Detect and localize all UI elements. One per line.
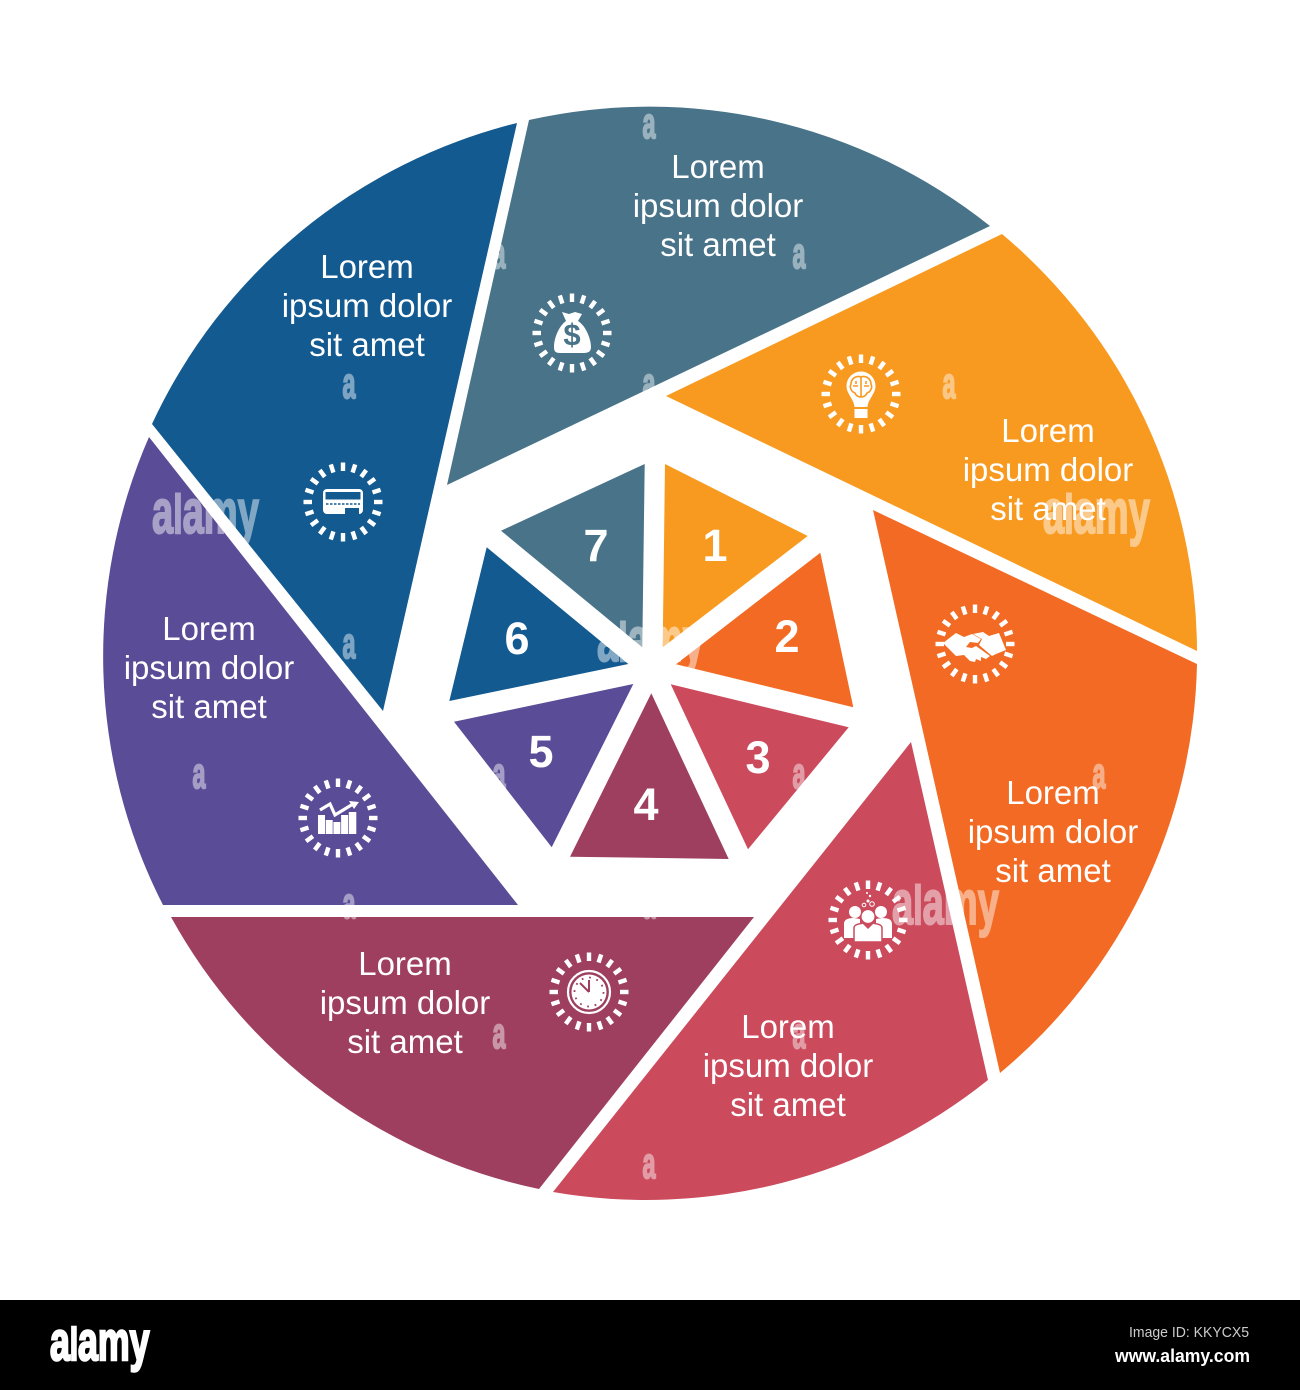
watermark: right: alamy [1043,476,1150,546]
footer logo: alamy [50,1310,150,1372]
inner triangle 3 [671,684,849,849]
icon: credit card [304,462,382,542]
watermark: small repeated marks: a [793,1009,806,1058]
text block: segment 4: ipsum dolor [320,984,490,1021]
text block: segment 1: ipsum dolor [963,451,1133,488]
watermark: small repeated marks: a [493,229,506,278]
watermark: small repeated marks: a [343,619,356,668]
outer segment 3: red [553,742,988,1200]
footer image id: Image ID: KKYCX5 [1129,1324,1249,1341]
text block: segment 6: Lorem [320,248,414,285]
text block: segment 7: ipsum dolor [633,187,803,224]
outer segment 6: blue [152,123,517,711]
outer segment 5: purple [103,437,518,905]
text block: segment 5: ipsum dolor [124,649,294,686]
watermark: small repeated marks: a [793,229,806,278]
text block: segment 7: sit amet [660,226,776,263]
inner triangle 6 [449,547,628,701]
watermark: lower right: alamy [892,867,999,937]
number 3: 3 [745,732,771,783]
outer segment 1: orange [666,234,1197,651]
inner triangle 2 [676,553,853,707]
text block: segment 4: sit amet [347,1023,463,1060]
text block: segment 1: Lorem [1001,412,1095,449]
watermark: small repeated marks: a [643,1139,656,1188]
number 1: 1 [702,520,728,571]
watermark: small repeated marks: a [493,749,506,798]
text block: segment 5: Lorem [162,610,256,647]
icon: bar chart with rising arrow [298,778,378,858]
icon: lightbulb with brain [822,354,900,434]
inner triangle 4 [570,693,729,859]
inner triangle 1 [663,464,808,647]
icon: wall clock [550,952,628,1032]
text block: segment 1: sit amet [990,490,1106,527]
outer segment 7: slate teal [447,107,990,485]
watermark: small repeated marks: a [343,879,356,928]
outer segment 4: plum [171,917,754,1189]
icon: money bag [532,294,612,372]
text block: segment 2: ipsum dolor [968,813,1138,850]
number 6: 6 [504,613,530,664]
watermark: small repeated marks [193,99,1106,1188]
text block: segment 2: Lorem [1006,774,1100,811]
text block: segment 2: sit amet [995,852,1111,889]
icon: money bag: $ [563,317,581,352]
footer bar [0,1300,1300,1390]
watermark: small repeated marks: a [493,1009,506,1058]
watermark: small repeated marks: a [643,879,656,928]
inner triangle 7 [501,464,645,647]
watermark: left: alamy [152,476,259,546]
watermark: small repeated marks: a [1093,749,1106,798]
footer url: www.alamy.com [1114,1346,1250,1366]
watermark: small repeated marks: a [793,749,806,798]
icon: handshake [936,604,1014,684]
text block: segment 7: Lorem [671,148,765,185]
text block: segment 6: ipsum dolor [282,287,452,324]
text block: segment 5: sit amet [151,688,267,725]
watermark: small repeated marks: a [643,99,656,148]
watermark: small repeated marks: a [343,359,356,408]
text block: segment 4: Lorem [358,945,452,982]
watermark: centre: alamy [597,604,704,674]
inner triangle 5 [454,684,633,847]
number 4: 4 [633,779,659,830]
text block: segment 3: sit amet [730,1086,846,1123]
text block: segment 3: Lorem [741,1008,835,1045]
watermark: small repeated marks: a [643,359,656,408]
number 7: 7 [583,520,609,571]
number 5: 5 [528,726,554,777]
number 2: 2 [774,611,800,662]
outer segment 2: dark orange [873,510,1197,1073]
icon: business team [828,880,908,960]
text block: segment 3: ipsum dolor [703,1047,873,1084]
text block: segment 6: sit amet [309,326,425,363]
watermark: small repeated marks: a [943,359,956,408]
watermark: small repeated marks: a [193,749,206,798]
